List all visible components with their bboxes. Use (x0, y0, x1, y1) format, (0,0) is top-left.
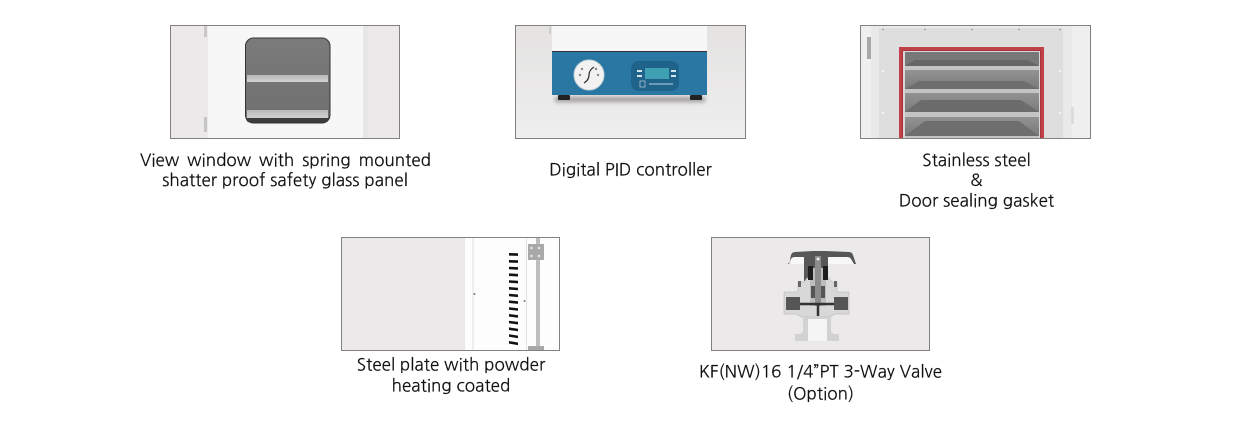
caption: steel plate: heating coated (392, 378, 510, 394)
icon: door hinge (528, 238, 544, 350)
panel: digital PID controller photo (516, 26, 746, 138)
caption: valve: KF(NW)16 1/4”PT 3-Way Valve (699, 362, 942, 380)
caption: view window (140, 152, 431, 189)
caption: stainless steel: Door sealing gasket (899, 192, 1055, 210)
caption: steel plate (357, 356, 546, 394)
caption: stainless steel: Stainless steel (922, 152, 1031, 169)
panel: view window photo (170, 26, 400, 138)
panel: valve (712, 238, 930, 350)
panel: stainless steel chamber photo (860, 26, 1090, 138)
icon: vent slots (509, 253, 518, 345)
caption: valve: (Option) (787, 384, 854, 402)
caption: steel plate: Steel plate with powder (357, 356, 546, 374)
panel: steel plate photo (342, 238, 560, 350)
chamber shelves (903, 51, 1040, 138)
caption: controller: Digital PID controller (549, 162, 713, 178)
icon: KF valve cross-section (784, 251, 856, 341)
caption: stainless steel: & (970, 172, 983, 189)
icon: glass window (246, 38, 330, 123)
caption: stainless steel (899, 152, 1055, 210)
caption: valve (699, 362, 942, 402)
icon: digital controller (631, 61, 679, 91)
caption: view window: shatter proof safety glass panel (162, 172, 408, 189)
icon: pressure gauge (574, 60, 604, 90)
caption: view window: View window with spring mounted (140, 152, 431, 169)
icon: red door gasket (899, 47, 1044, 138)
